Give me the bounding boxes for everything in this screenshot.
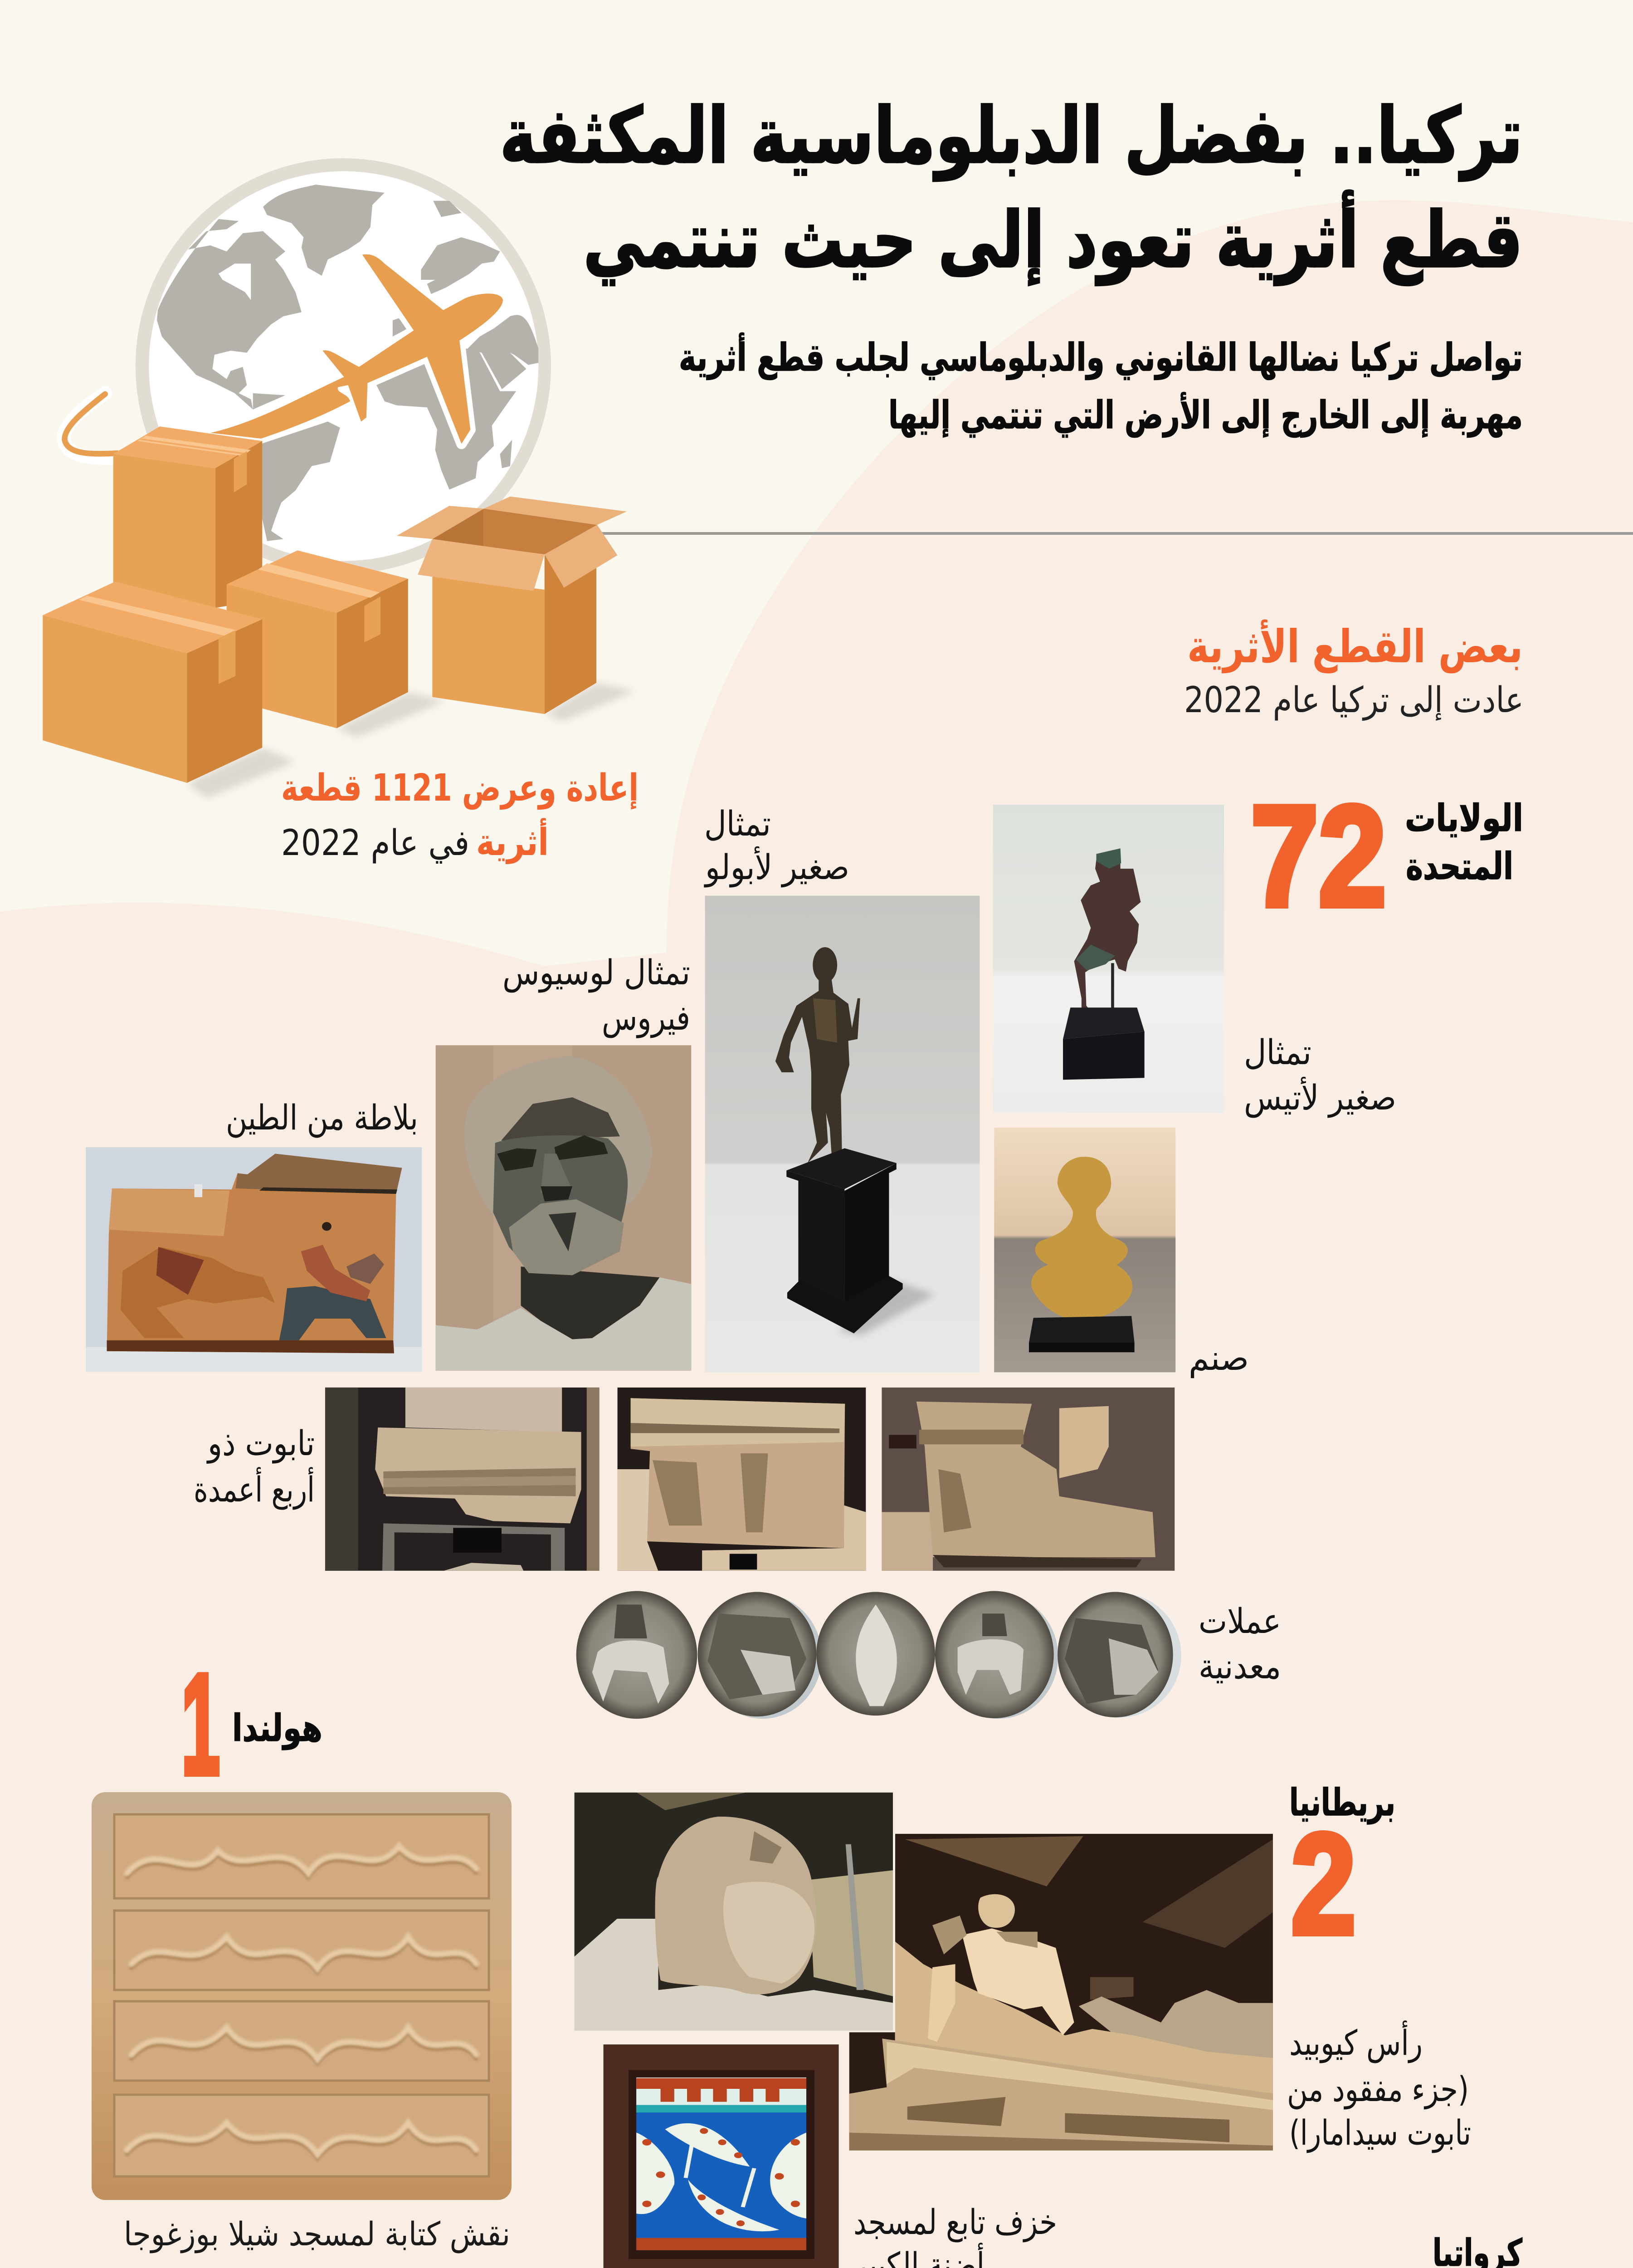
- icon: box front: [43, 582, 296, 798]
- caption: cupid head: تابوت سيدامارا): [1289, 2112, 1471, 2153]
- panel: united states: [86, 776, 1523, 1719]
- illustration: globe, plane and boxes: [43, 158, 636, 798]
- photo: terracotta plaque: [86, 1147, 422, 1372]
- caption: Attis: [1244, 1032, 1396, 1118]
- caption: tile: خزف تابع لمسجد: [853, 2202, 1057, 2243]
- country label: الولايات: [1405, 797, 1523, 840]
- country label: بريطانيا: [1289, 1781, 1395, 1824]
- callout: 1121 artifacts: أثرية: [476, 818, 549, 864]
- icon: box back tall: [113, 426, 262, 608]
- title: [500, 91, 1523, 286]
- photos: terracotta plaque and Lucius Verus: [86, 1045, 691, 1372]
- icon: plane: [210, 254, 503, 444]
- photo: statuette of Apollo: [705, 896, 980, 1372]
- caption: Lucius Verus: تمثال لوسيوس: [502, 952, 690, 993]
- callout: 1121 artifacts: إعادة وعرض 1121 قطعة: [281, 767, 639, 810]
- caption: cupid head: رأس كيوبيد: [1289, 2020, 1423, 2063]
- photo: idol: [994, 1128, 1175, 1372]
- photo: sarcophagus right: [882, 1388, 1175, 1571]
- caption: terracotta plaque: بلاطة من الطين: [226, 1097, 418, 1138]
- country label: المتحدة: [1406, 845, 1513, 888]
- photo: tile in frame: [604, 2044, 839, 2268]
- panel: netherlands: [92, 1644, 512, 2253]
- caption: coins: معدنية: [1199, 1646, 1281, 1686]
- divider: [599, 532, 1633, 535]
- icon: swoosh trail: [64, 393, 117, 458]
- photo: sarcophagus relief: [849, 1834, 1273, 2151]
- country label: هولندا: [232, 1707, 322, 1750]
- section heading: [1184, 619, 1524, 721]
- caption: sarcophagus: تابوت ذو: [206, 1423, 315, 1464]
- caption: sarcophagus: [194, 1423, 315, 1510]
- icon: box middle: [227, 550, 445, 738]
- photo: cupid head: [573, 1792, 894, 2032]
- photo: statuette of Attis: [993, 805, 1224, 1113]
- photo: mosque inscription: [92, 1792, 512, 2200]
- photo: Lucius Verus head: [436, 1045, 691, 1371]
- panel: netherlands: 1: [181, 1644, 220, 1804]
- photo: sarcophagus left: [325, 1388, 600, 1571]
- caption: cupid head: (جزء مفقود من: [1287, 2069, 1469, 2110]
- photos: statuettes and idol: [705, 805, 1224, 1372]
- number 72: 72: [1251, 776, 1386, 936]
- caption: Apollo: [703, 803, 849, 888]
- caption: coins: عملات: [1199, 1601, 1281, 1641]
- country label: [1405, 797, 1523, 888]
- section heading: عادت إلى تركيا عام 2022: [1184, 680, 1524, 721]
- caption: Apollo: تمثال: [704, 803, 771, 844]
- caption: Attis: صغير لأتيس: [1244, 1077, 1396, 1118]
- caption: cupid head: [1287, 2020, 1471, 2153]
- photos: sarcophagus fragments and coins: [325, 1388, 1181, 1719]
- photo: sarcophagus middle: [618, 1388, 866, 1571]
- caption: Apollo: صغير لأبولو: [703, 846, 849, 888]
- panel: britain: [573, 1781, 1471, 2268]
- icon: globe: [136, 158, 551, 574]
- section heading: بعض القطع الأثرية: [1187, 619, 1523, 674]
- caption: idol: صنم: [1189, 1338, 1249, 1378]
- callout: 1121 artifacts: في عام 2022: [281, 823, 469, 864]
- caption: coins: [1199, 1601, 1281, 1686]
- callout: 1121 artifacts: [281, 767, 639, 864]
- caption: sarcophagus: أربع أعمدة: [194, 1467, 315, 1510]
- photos: britain artifacts: [573, 1792, 1273, 2268]
- caption: Attis: تمثال: [1244, 1032, 1311, 1072]
- caption: Lucius Verus: [502, 952, 690, 1038]
- icon: open box: [397, 497, 636, 721]
- intro text: [679, 332, 1523, 438]
- photo: silver coins: [576, 1591, 1181, 1719]
- caption: tile: [852, 2202, 1057, 2268]
- caption: Lucius Verus: فيروس: [602, 997, 690, 1038]
- number 2: 2: [1291, 1804, 1356, 1964]
- caption: inscription: نقش كتابة لمسجد شيلا بوزغوجا: [124, 2215, 510, 2253]
